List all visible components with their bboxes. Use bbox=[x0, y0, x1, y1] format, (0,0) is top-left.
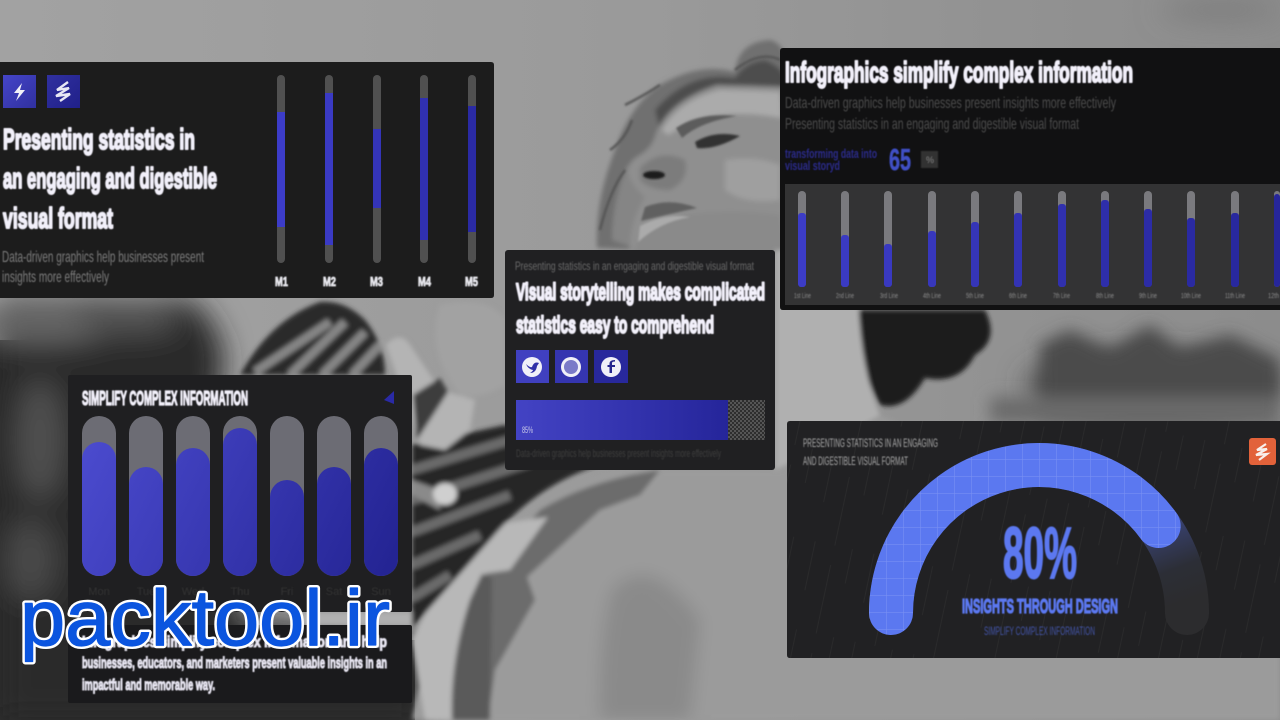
neck bbox=[775, 250, 882, 470]
bar chart: twelve lines: 10th Line bbox=[1181, 293, 1201, 300]
bar chart: twelve lines: 6th Line bbox=[1009, 293, 1027, 300]
gauge title: INSIGHTS THROUGH DESIGN bbox=[962, 596, 1118, 618]
panel: infographics simplify with twelve bars bbox=[780, 48, 1280, 310]
description: insights more effectively bbox=[2, 269, 109, 286]
value: 80% bbox=[1003, 514, 1077, 594]
bar chart: weekdays: Sat bbox=[326, 586, 342, 598]
description: Data-driven graphics help businesses present insights more effectively bbox=[785, 95, 1116, 112]
gauge chart bbox=[891, 465, 1187, 613]
hand and cup bbox=[436, 302, 505, 396]
panel: summary text bbox=[68, 625, 412, 703]
bar chart: twelve lines: 7th Line bbox=[1053, 293, 1070, 300]
bar chart: M1 to M5: M4 bbox=[418, 274, 432, 289]
stat: 65 percent: 65 bbox=[889, 142, 911, 177]
gauge subtitle: SIMPLIFY COMPLEX INFORMATION bbox=[984, 624, 1095, 638]
bar chart: weekdays bbox=[82, 416, 398, 598]
stat: 65 percent: % bbox=[926, 155, 934, 165]
caption bbox=[803, 436, 938, 468]
shirt body bbox=[412, 415, 1280, 720]
icon: twitter bbox=[516, 350, 549, 383]
bar chart: twelve lines: 3rd Line bbox=[880, 293, 898, 300]
bar chart: weekdays: Mon bbox=[88, 586, 110, 598]
bar chart: weekdays: Tue bbox=[137, 586, 155, 598]
progress bar: 85% bbox=[522, 425, 533, 435]
icon: brand mark bbox=[47, 75, 80, 108]
bar chart: M1 to M5: M5 bbox=[465, 274, 478, 289]
panel: statistics with monthly bars bbox=[0, 62, 494, 298]
watermark: packtool.ir bbox=[20, 573, 390, 662]
stat: 65 percent: visual storyd bbox=[785, 158, 840, 173]
hair bbox=[597, 40, 791, 250]
icon: facebook bbox=[594, 350, 628, 383]
bar chart: M1 to M5: M3 bbox=[370, 274, 383, 289]
bar chart: twelve lines bbox=[785, 184, 1280, 305]
progress bar bbox=[516, 400, 765, 440]
stat: 65 percent: transforming data into bbox=[785, 146, 877, 161]
icon: orange brand mark bbox=[1249, 438, 1276, 465]
panel: visual storytelling with social icons bbox=[505, 250, 775, 470]
heading: Presenting statistics in bbox=[3, 124, 195, 156]
panel: summary text: Infographics simplify complex information and help bbox=[82, 634, 387, 651]
panel: weekly pill chart bbox=[68, 375, 412, 612]
bar chart: twelve lines: 1st Line bbox=[794, 293, 811, 300]
panel: summary text: businesses, educators, and marketers present valuable insights in an bbox=[82, 655, 387, 672]
bar chart: weekdays: Wed bbox=[182, 586, 204, 598]
heading bbox=[3, 124, 217, 235]
sleeve striped bbox=[412, 425, 610, 628]
bar chart: M1 to M5 bbox=[275, 75, 478, 289]
bar chart: weekdays: Fri bbox=[281, 586, 293, 598]
nose, eye and lips bbox=[643, 171, 665, 179]
face bbox=[628, 85, 790, 255]
stat: 65 percent bbox=[785, 142, 938, 177]
bar chart: twelve lines: 11th Line bbox=[1225, 293, 1245, 300]
bar chart: M1 to M5: M1 bbox=[275, 274, 288, 289]
description bbox=[2, 249, 204, 286]
caption: PRESENTING STATISTICS IN AN ENGAGING bbox=[803, 436, 938, 450]
bar chart: twelve lines: 2nd Line bbox=[836, 293, 854, 300]
hair behind neck bbox=[855, 310, 991, 406]
bar chart: twelve lines: 4th Line bbox=[923, 293, 941, 300]
striped cuff near hand bbox=[240, 302, 385, 375]
bar chart: twelve lines: 9th Line bbox=[1139, 293, 1157, 300]
description bbox=[785, 95, 1116, 133]
icon: instagram bbox=[555, 350, 588, 383]
heading: an engaging and digestible bbox=[3, 163, 217, 195]
panel: summary text: impactful and memorable way. bbox=[82, 677, 215, 694]
caption: AND DIGESTIBLE VISUAL FORMAT bbox=[803, 454, 908, 468]
panel: gauge 80 percent bbox=[787, 421, 1280, 658]
footnote: Data-driven graphics help businesses present insights more effectively bbox=[516, 448, 721, 460]
heading: statistics easy to comprehend bbox=[516, 312, 714, 339]
bar chart: weekdays: Sun bbox=[371, 586, 391, 598]
eyebrow text: Presenting statistics in an engaging and digestible visual format bbox=[515, 259, 754, 273]
heading bbox=[516, 279, 765, 339]
description: Presenting statistics in an engaging and digestible visual format bbox=[785, 116, 1079, 133]
heading: Visual storytelling makes complicated bbox=[516, 279, 765, 306]
description: Data-driven graphics help businesses present bbox=[2, 249, 204, 266]
heading: visual format bbox=[3, 203, 113, 235]
bar chart: weekdays: Thu bbox=[231, 586, 249, 598]
panel: weekly pill chart: SIMPLIFY COMPLEX INFORMATION bbox=[82, 388, 248, 410]
icon: small corner mark bbox=[384, 391, 394, 404]
watermark: packtool.ir bbox=[20, 573, 390, 662]
bar chart: M1 to M5: M2 bbox=[323, 274, 336, 289]
icon: lightning bbox=[3, 75, 36, 108]
bar chart: twelve lines: 8th Line bbox=[1096, 293, 1114, 300]
bar chart: twelve lines: 5th Line bbox=[966, 293, 984, 300]
light strip between lower panels bbox=[300, 612, 412, 626]
